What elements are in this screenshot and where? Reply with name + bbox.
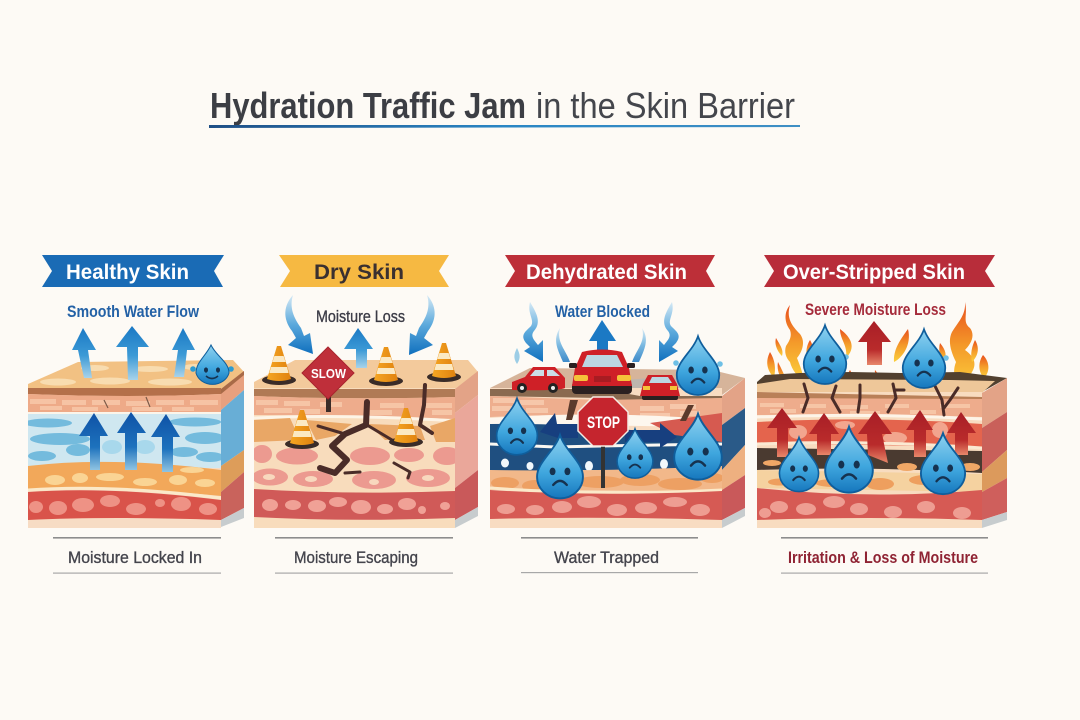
panel: over-stripped skin (757, 255, 1007, 574)
title (209, 85, 800, 128)
panel: dry skin (252, 255, 478, 574)
subtitle: severe moisture loss: Severe Moisture Loss (805, 300, 946, 319)
sign: slow (302, 347, 354, 412)
sign: stop (578, 397, 628, 488)
banner: Dry Skin (279, 255, 449, 287)
flames (767, 302, 988, 390)
sign: stop: STOP (587, 413, 620, 432)
panel: healthy skin (24, 255, 244, 574)
sad water drops (497, 336, 723, 498)
arrows: moisture loss (285, 295, 435, 368)
sign: slow: SLOW (311, 366, 347, 381)
caption: moisture locked in: Moisture Locked In (68, 548, 202, 567)
skin block: healthy (24, 360, 244, 528)
skin block: dehydrated (490, 368, 745, 528)
banner: Dry Skin: Dry Skin (314, 261, 404, 284)
arrows: water blocked (514, 302, 679, 448)
caption: water trapped: Water Trapped (554, 548, 659, 567)
icon: happy water drop (190, 345, 234, 384)
banner: Dehydrated Skin: Dehydrated Skin (526, 261, 687, 284)
cones (262, 343, 461, 449)
cars (512, 350, 680, 400)
banner: Dehydrated Skin (505, 255, 715, 287)
panel: dehydrated skin (490, 255, 745, 573)
skin block: dry (252, 360, 478, 528)
title: in the Skin Barrier (536, 85, 795, 126)
subtitle: smooth water flow: Smooth Water Flow (67, 302, 200, 321)
cracks (318, 385, 432, 478)
banner: Over-Stripped Skin (764, 255, 995, 287)
arrows: surface flow (72, 326, 195, 380)
banner: Healthy Skin: Healthy Skin (66, 261, 189, 284)
subtitle: moisture loss: Moisture Loss (316, 307, 405, 326)
banner: Over-Stripped Skin: Over-Stripped Skin (783, 261, 965, 284)
skin block: over-stripped (757, 372, 1007, 528)
subtitle: water blocked: Water Blocked (555, 302, 650, 321)
caption: irritation and loss of moisture: Irritation & Loss of Moisture (788, 548, 978, 567)
banner: Healthy Skin (42, 255, 224, 287)
caption: moisture escaping: Moisture Escaping (294, 548, 418, 567)
sad water drops (779, 325, 965, 494)
arrows: red moisture loss (767, 321, 976, 463)
title: Hydration Traffic Jam (210, 85, 526, 126)
arrows: inner flow (79, 412, 180, 472)
